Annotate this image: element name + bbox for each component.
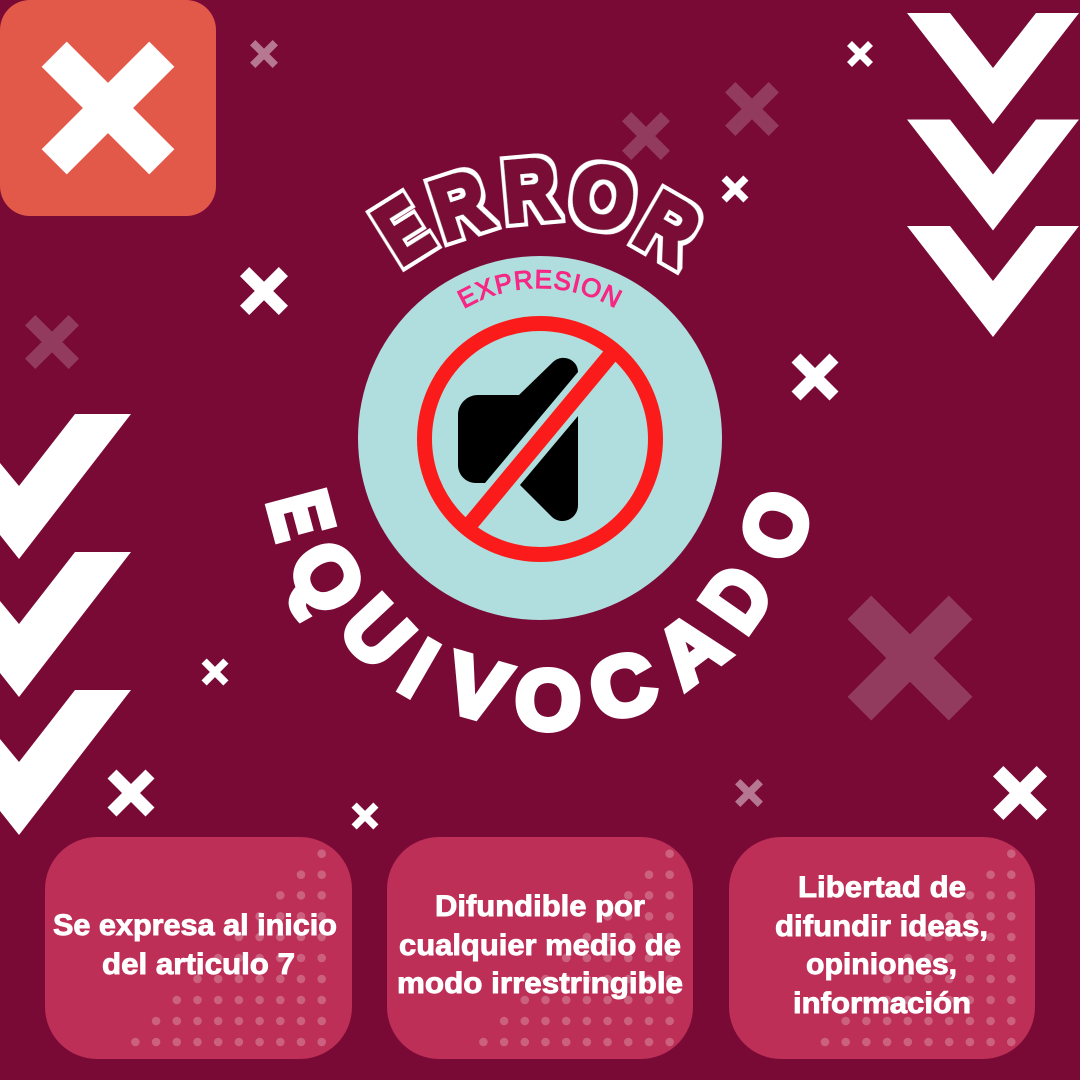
title: ERROR: O [566,147,640,248]
title: ERROR: R [500,141,560,239]
panel: libertad: Libertad de [798,871,966,904]
title: EQUIVOCADO: I [387,622,451,714]
title: EQUIVOCADO: U [323,580,430,685]
panel: inicio del articulo: Se expresa al inicio [53,909,337,942]
icon: check marks, left side [0,414,131,835]
title: EQUIVOCADO: O [514,652,582,748]
panel: difundible: Difundible por [435,890,645,923]
panel: libertad: información [793,987,971,1020]
panel: libertad [729,837,1035,1059]
teal circle [358,256,722,620]
title: ERROR [360,141,714,282]
panel: difundible [387,837,693,1059]
title: ERROR: E [360,178,446,281]
curved label: EXPRESION: EXPRESION [456,270,622,308]
icon: muted speaker [424,324,656,554]
title: EQUIVOCADO: D [683,549,791,647]
panel: difundible: cualquier medio de [399,929,681,962]
title: EQUIVOCADO: C [580,633,666,740]
title: EQUIVOCADO: E [250,482,352,548]
panel: libertad: opiniones, [806,948,957,981]
panel: difundible: modo irrestringible [397,967,683,1000]
panel: inicio del articulo: del articulo 7 [102,948,295,981]
title: EQUIVOCADO: O [721,478,831,572]
title: EQUIVOCADO: V [436,635,518,742]
title: EQUIVOCADO: A [638,593,743,705]
title: EQUIVOCADO: Q [270,525,384,629]
title: EQUIVOCADO [250,478,831,748]
icon: orange error badge [0,0,216,216]
decorative cross marks [30,43,1042,827]
title: ERROR: R [622,174,714,282]
icon: chevrons pointing down, top right [907,13,1079,337]
panel: libertad: difundir ideas, [775,910,988,943]
panel: inicio del articulo [45,837,352,1059]
title: ERROR: R [421,152,499,258]
